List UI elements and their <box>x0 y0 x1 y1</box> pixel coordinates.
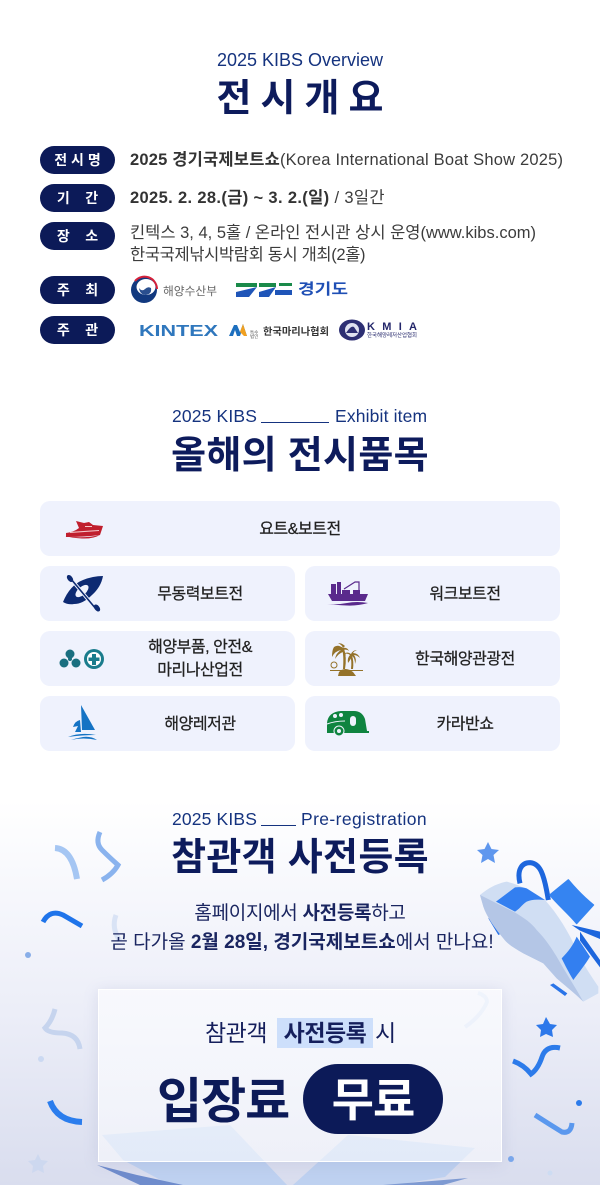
organizer logos: 법인 <box>250 333 258 339</box>
organizer logos: 한국마리나협회 <box>263 325 329 338</box>
invitation text: 곧 다가올 2월 28일, 경기국제보트쇼에서 만나요! <box>110 932 494 953</box>
venue value: 한국국제낚시박람회 동시 개최(2홀) <box>130 246 365 264</box>
label: organizer <box>40 316 115 344</box>
venue value <box>130 224 536 264</box>
exhibit subtitle <box>172 406 427 426</box>
open box behind panel <box>97 992 489 1185</box>
card: yacht <box>40 501 560 556</box>
label: 마리나산업전 <box>157 662 243 679</box>
exhibition name value: 2025 경기국제보트쇼(Korea International Boat Show 2025) <box>130 151 563 169</box>
card: non-powered boats <box>40 566 295 621</box>
label <box>148 638 252 679</box>
label: 워크보트전 <box>429 586 501 603</box>
free admission panel <box>98 989 502 1162</box>
exhibit subtitle: 2025 KIBS <box>172 406 257 426</box>
label: period: 기 간 <box>57 190 98 206</box>
label: host <box>40 276 115 304</box>
label: exhibition name <box>40 146 115 174</box>
registration line: 참관객 <box>205 1020 267 1046</box>
icon: kayak <box>63 575 103 612</box>
host logos: 경기도 <box>298 281 348 298</box>
label: 해양레저관 <box>164 716 236 733</box>
label: organizer: 주 관 <box>57 322 98 338</box>
label: 한국해양관광전 <box>415 651 515 668</box>
label: host: 주 최 <box>57 282 98 298</box>
registration line <box>205 1018 396 1048</box>
icon: caravan <box>327 711 369 736</box>
host logos <box>131 276 348 303</box>
organizer logos: 특수 <box>250 330 258 336</box>
overview subtitle: 2025 KIBS Overview <box>217 50 383 70</box>
confetti right <box>508 1017 582 1176</box>
card: marine tourism <box>305 631 560 686</box>
label: exhibition name: 전 시 명 <box>54 152 101 168</box>
organizer logos: KINTEX <box>139 323 219 340</box>
card: marine leisure <box>40 696 295 751</box>
label: 요트&보트전 <box>259 521 341 538</box>
pre-registration subtitle: Pre-registration <box>301 808 427 828</box>
icon: propeller and safety cross <box>60 649 104 669</box>
gift box with ribbon <box>480 860 600 1002</box>
icon: palm island <box>330 643 363 676</box>
organizer logos: 한국해양레저산업협회 <box>367 331 417 339</box>
invitation text: 홈페이지에서 사전등록하고 <box>194 903 406 924</box>
card: work boats <box>305 566 560 621</box>
period value: 2025. 2. 28.(금) ~ 3. 2.(일) / 3일간 <box>130 189 385 207</box>
invitation text <box>110 903 494 953</box>
free badge: 무료 <box>332 1074 414 1126</box>
card: caravan <box>305 696 560 751</box>
organizer logos <box>139 320 417 340</box>
registration line: 사전등록 <box>284 1020 366 1046</box>
free badge <box>303 1064 443 1134</box>
organizer logos: KMIA <box>367 321 417 333</box>
exhibit title: 올해의 전시품목 <box>171 435 429 477</box>
icon: yacht <box>65 521 103 538</box>
label: venue <box>40 222 115 250</box>
confetti left <box>25 831 122 1173</box>
exhibit subtitle: Exhibit item <box>335 406 427 426</box>
pre-registration subtitle: 2025 KIBS <box>172 808 257 828</box>
pre-registration title: 참관객 사전등록 <box>171 837 429 879</box>
label: 해양부품, 안전& <box>148 639 252 656</box>
overview title: 전 시 개 요 <box>216 78 384 120</box>
card: marine parts <box>40 631 295 686</box>
admission label: 입장료 <box>157 1075 289 1129</box>
star above gift <box>477 842 499 863</box>
label: 카라반쇼 <box>436 716 494 733</box>
label: venue: 장 소 <box>57 228 98 244</box>
pre-registration subtitle <box>172 808 427 828</box>
label: period <box>40 184 115 212</box>
label: 무동력보트전 <box>157 586 243 603</box>
background gradient <box>0 800 600 1185</box>
icon: work boat <box>328 581 368 606</box>
registration line: 시 <box>375 1020 396 1046</box>
venue value: 킨텍스 3, 4, 5홀 / 온라인 전시관 상시 운영(www.kibs.com) <box>130 224 536 242</box>
host logos: 해양수산부 <box>163 285 217 298</box>
icon: windsurfer <box>68 705 97 740</box>
